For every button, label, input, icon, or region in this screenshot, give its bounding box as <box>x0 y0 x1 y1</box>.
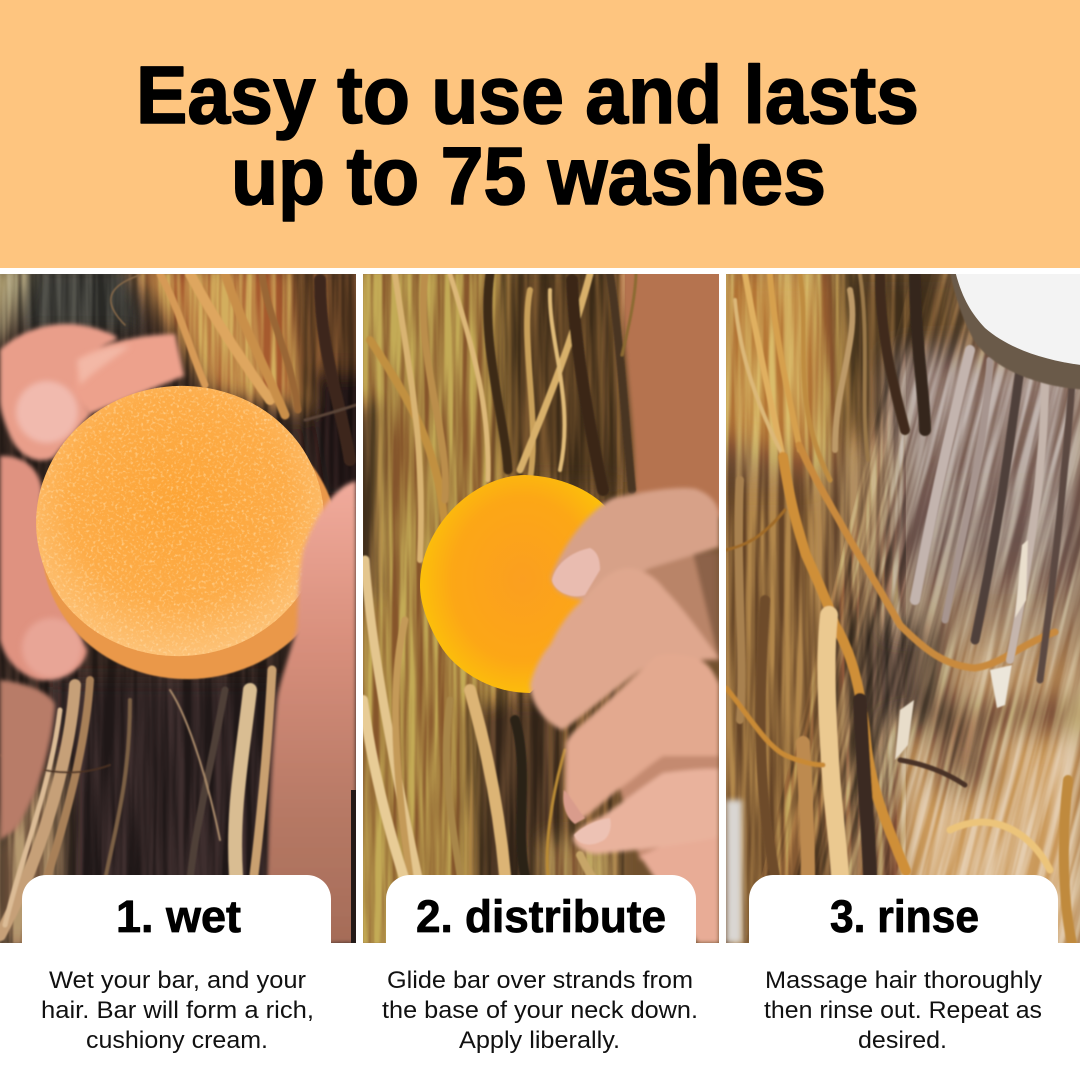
label tab: step 2: 2. distribute <box>416 891 666 942</box>
skin background <box>619 274 719 518</box>
text: step 2 description: Apply liberally. <box>459 1027 620 1054</box>
foam patches <box>895 540 1028 760</box>
text: step 3 description <box>764 967 1042 1054</box>
hair strands <box>363 274 636 940</box>
hand: fingers on left <box>0 324 184 840</box>
title: up to 75 washes <box>231 131 826 222</box>
water streams <box>915 350 1072 680</box>
text: step 1 description: hair. Bar will form a rich, <box>41 997 314 1024</box>
header banner <box>0 0 1080 268</box>
hair streak texture <box>726 274 906 943</box>
text: step 2 description <box>382 967 698 1054</box>
hair streak texture <box>0 274 356 943</box>
shower head <box>950 274 1080 390</box>
label tab: step 3: 3. rinse <box>830 891 979 942</box>
hair strands <box>0 274 356 940</box>
label tab: step 1 <box>22 875 331 943</box>
soap bar <box>36 386 332 680</box>
label tab: step 1: 1. wet <box>116 891 241 942</box>
title: Easy to use and lasts <box>136 50 919 141</box>
soap bar <box>420 475 606 693</box>
hair background blocks <box>0 262 370 950</box>
text: step 3 description: desired. <box>858 1027 947 1054</box>
text: step 3 description: Massage hair thoroughly <box>765 967 1042 994</box>
text: step 2 description: Glide bar over strands from <box>387 967 693 994</box>
right thumb <box>265 481 357 943</box>
panel: step 2 photo <box>363 274 719 943</box>
finger nails <box>16 346 130 678</box>
panel: step 3 photo <box>726 274 1080 943</box>
title <box>136 50 919 222</box>
label tab: step 2 <box>386 875 696 943</box>
hand <box>530 488 719 943</box>
hair streak texture <box>363 274 625 943</box>
label tab: step 3 <box>749 875 1058 943</box>
spray streak texture <box>746 274 1080 943</box>
finger nails <box>552 548 611 845</box>
text: step 1 description <box>41 967 314 1054</box>
pale background <box>726 800 742 943</box>
panel: step 1 photo <box>0 262 370 950</box>
hair strands <box>726 274 1072 943</box>
text: step 1 description: cushiony cream. <box>86 1027 268 1054</box>
text: step 3 description: then rinse out. Repeat as <box>764 997 1042 1024</box>
text: step 1 description: Wet your bar, and your <box>49 967 306 994</box>
text: step 2 description: the base of your neck down. <box>382 997 698 1024</box>
